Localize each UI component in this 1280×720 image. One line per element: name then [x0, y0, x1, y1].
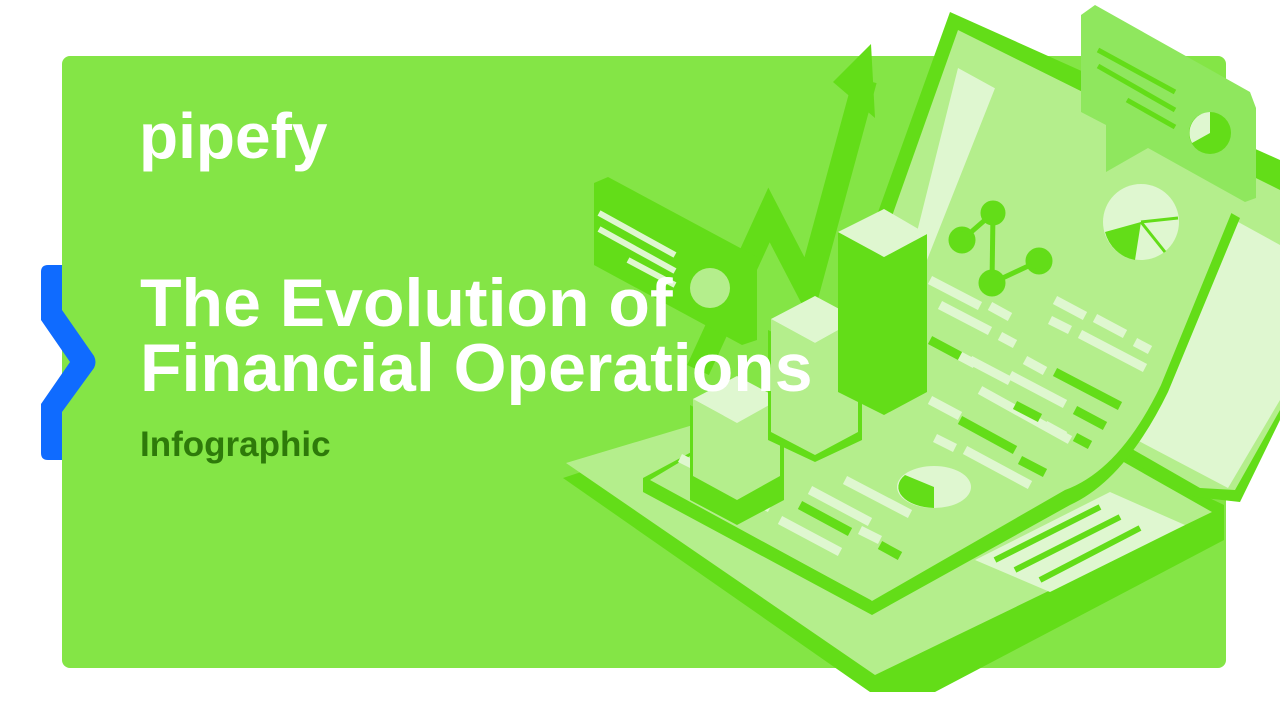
icon: blue chevron	[41, 265, 96, 460]
title	[140, 265, 813, 406]
top right card	[1081, 5, 1256, 202]
title: Financial Operations	[140, 330, 813, 406]
paper edge	[643, 82, 1240, 615]
green panel	[62, 56, 1226, 668]
logo: pipefy: pipefy	[139, 100, 327, 172]
subtitle: Infographic	[140, 425, 331, 464]
inner screen	[900, 68, 1280, 488]
bar middle	[768, 296, 862, 462]
laptop base edge	[563, 380, 1224, 692]
laptop base top	[566, 378, 1212, 675]
title: The Evolution of	[140, 265, 673, 341]
bar tall	[838, 209, 927, 415]
bar small	[690, 376, 784, 525]
keyboard	[975, 492, 1185, 592]
bottom bright line on paper	[645, 482, 870, 603]
pie on base	[897, 466, 971, 508]
paper	[650, 73, 1233, 601]
node graph	[951, 203, 1050, 294]
arrow trend	[698, 44, 875, 370]
table dashes	[680, 280, 1150, 552]
left card	[594, 177, 757, 345]
screen back	[868, 12, 1280, 502]
pie chart on paper	[1103, 184, 1179, 260]
